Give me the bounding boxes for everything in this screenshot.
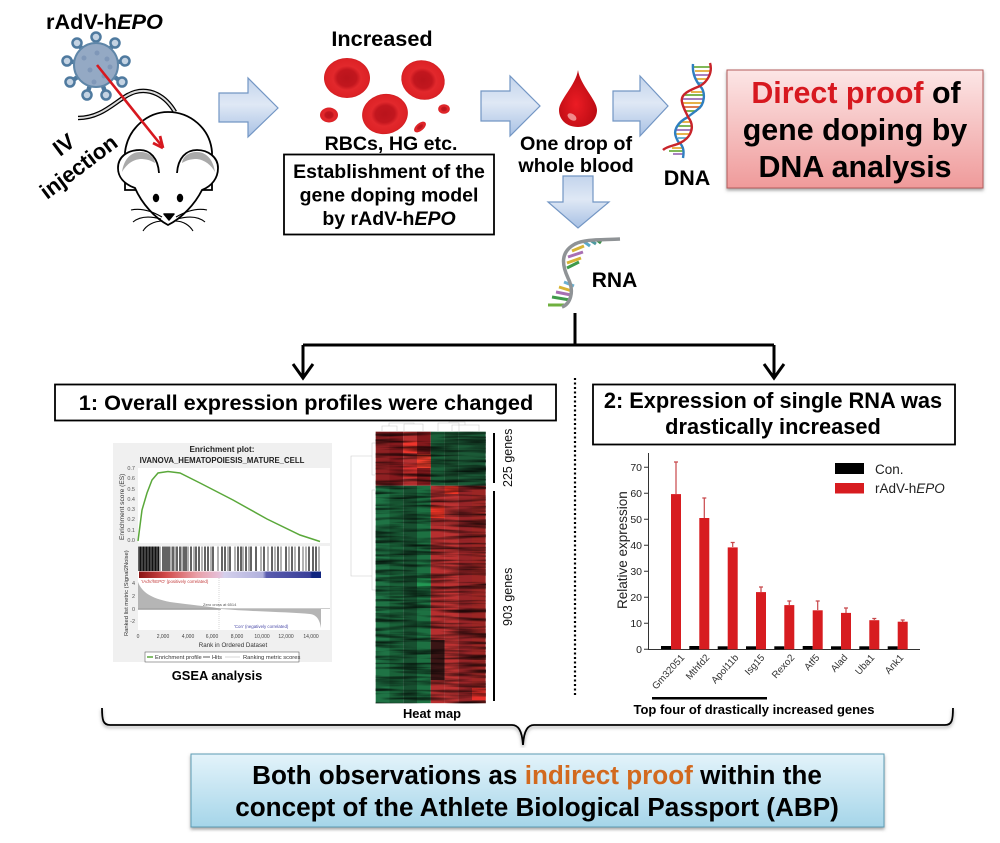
chart: GSEA enrichment plot: 0.0 xyxy=(127,538,135,544)
arrow: to blood drop xyxy=(481,76,540,136)
legend: Con. xyxy=(875,462,904,477)
legend xyxy=(835,462,945,496)
chart: relative expression bars: 40 xyxy=(630,540,642,552)
label: 225 genes: 225 genes xyxy=(501,429,515,487)
chart: GSEA enrichment plot: Ranked list metric (Signal2Noise) xyxy=(124,550,130,636)
heading: panel 2 xyxy=(593,384,955,444)
box: gene doping model: Establishment of the xyxy=(293,161,485,183)
chart: GSEA enrichment plot: 0.2 xyxy=(127,517,135,523)
icon: RNA strand xyxy=(548,239,620,307)
chart: relative expression bars xyxy=(615,453,945,692)
connector: split arrows xyxy=(293,313,784,378)
label: one drop of whole blood: One drop of xyxy=(520,133,632,155)
chart: GSEA enrichment plot: IVANOVA_HEMATOPOIESIS_MATURE_CELL xyxy=(140,456,305,465)
arrow: to RNA xyxy=(548,176,609,228)
chart: GSEA enrichment plot: 0.5 xyxy=(127,487,135,493)
label: one drop of whole blood: whole blood xyxy=(517,155,634,177)
label: one drop of whole blood xyxy=(517,133,634,177)
chart: GSEA enrichment plot: Ranking metric scores xyxy=(243,655,300,661)
box: gene doping model xyxy=(284,154,494,234)
gene labels xyxy=(650,652,906,692)
chart: GSEA enrichment plot: 0.7 xyxy=(127,466,135,472)
label: rAdV-hEPO: rAdV-hEPO xyxy=(46,9,163,34)
gene labels: Apol11b xyxy=(709,652,742,686)
label: IV injection: injection xyxy=(35,130,122,204)
legend: rAdV-hEPO xyxy=(875,481,945,496)
chart: GSEA enrichment plot: 4,000 xyxy=(182,634,194,640)
chart: relative expression bars: 10 xyxy=(630,618,642,630)
control bars xyxy=(661,646,898,649)
chart: GSEA enrichment plot: Enrichment plot: xyxy=(189,445,255,454)
gene labels: Gm32051 xyxy=(650,653,687,692)
box: gene doping model: by rAdV-hEPO xyxy=(322,208,456,230)
gene labels: Alad xyxy=(829,653,850,675)
label: Heat map: Heat map xyxy=(403,706,461,721)
box: indirect proof: concept of the Athlete Biological Passport (ABP) xyxy=(235,792,839,822)
chart: GSEA enrichment plot: Enrichment score (ES) xyxy=(119,474,126,540)
label: 903 genes: 903 genes xyxy=(501,568,515,626)
box: direct proof xyxy=(727,70,983,188)
box: direct proof: DNA analysis xyxy=(758,150,952,184)
chart: GSEA enrichment plot: Hits xyxy=(212,655,222,661)
chart: GSEA enrichment plot: 0.6 xyxy=(127,476,135,482)
treated bars xyxy=(671,494,908,649)
heading: panel 1 xyxy=(55,384,556,420)
icon: DNA helix xyxy=(663,63,711,158)
heading: panel 2: drastically increased xyxy=(665,414,881,439)
chart: GSEA enrichment plot: 0.1 xyxy=(127,528,135,534)
box: direct proof: gene doping by xyxy=(743,113,967,147)
label: DNA: DNA xyxy=(664,166,710,190)
gene labels: Uba1 xyxy=(853,653,877,677)
heading: panel 2: 2: Expression of single RNA was xyxy=(604,388,942,413)
label: top four genes: Top four of drastically increased genes xyxy=(633,702,875,717)
arrow: injection xyxy=(97,65,163,148)
chart: GSEA enrichment plot: 0 xyxy=(137,634,140,640)
box: indirect proof: Both observations as indirect proof within the xyxy=(252,760,822,790)
chart: GSEA enrichment plot: 4 xyxy=(132,581,135,587)
box: gene doping model: gene doping model xyxy=(300,184,478,206)
icon: virus xyxy=(62,32,130,100)
chart: GSEA enrichment plot: 12,000 xyxy=(278,634,294,640)
label: RNA: RNA xyxy=(592,269,637,292)
arrow: to DNA xyxy=(613,76,668,136)
chart: GSEA enrichment plot: Rank in Ordered Dataset xyxy=(199,642,267,649)
chart: GSEA enrichment plot: 'Con' (negatively correlated) xyxy=(234,624,289,629)
chart: GSEA enrichment plot: 2,000 xyxy=(157,634,169,640)
chart: relative expression bars: 50 xyxy=(630,514,642,526)
label: GSEA analysis: GSEA analysis xyxy=(172,668,262,683)
chart: GSEA enrichment plot: 0.3 xyxy=(127,507,135,513)
box: indirect proof xyxy=(191,754,884,827)
chart: GSEA enrichment plot: Enrichment profile xyxy=(155,655,202,661)
chart: GSEA enrichment plot: 2 xyxy=(132,594,135,600)
heading: panel 1: 1: Overall expression profiles were changed xyxy=(79,390,533,415)
chart: GSEA enrichment plot xyxy=(113,443,332,662)
label: 225 genes xyxy=(494,429,515,487)
chart: GSEA enrichment plot: 0 xyxy=(132,607,135,613)
gene labels: Mthfd2 xyxy=(684,653,712,682)
gene labels: Rexo2 xyxy=(770,653,797,681)
chart: GSEA enrichment plot: 14,000 xyxy=(303,634,319,640)
label: RBCs, HG etc.: RBCs, HG etc. xyxy=(325,133,457,155)
chart: GSEA enrichment plot: 6,000 xyxy=(206,634,218,640)
chart: GSEA enrichment plot: 10,000 xyxy=(254,634,270,640)
label: IV injection: IV xyxy=(48,128,80,161)
chart: relative expression bars: 60 xyxy=(630,488,642,500)
error bars xyxy=(674,462,905,622)
chart: relative expression bars: Relative expression xyxy=(615,491,630,609)
chart: relative expression bars: 70 xyxy=(630,462,642,474)
chart: relative expression bars: 20 xyxy=(630,592,642,604)
icon: red blood cells xyxy=(320,54,450,138)
icon: blood drop xyxy=(559,70,597,127)
icon: mouse xyxy=(78,91,218,231)
gene labels: Isg15 xyxy=(743,652,768,678)
label: Increased: Increased xyxy=(331,26,433,51)
gene labels: Ank1 xyxy=(883,653,906,677)
chart: GSEA enrichment plot: 0.4 xyxy=(127,497,135,503)
brace xyxy=(102,708,953,745)
chart: heat map xyxy=(351,422,486,703)
chart: relative expression bars: 30 xyxy=(630,566,642,578)
gene labels: Atf5 xyxy=(802,652,823,673)
divider xyxy=(574,378,576,696)
chart: GSEA enrichment plot: 8,000 xyxy=(231,634,243,640)
chart: GSEA enrichment plot: Zero cross at 6514 xyxy=(203,602,237,607)
chart: GSEA enrichment plot: 'rAdV/hEPO' (positively correlated) xyxy=(141,579,209,584)
chart: relative expression bars: 0 xyxy=(636,644,642,656)
chart: GSEA enrichment plot: -2 xyxy=(130,619,135,625)
arrow: to red cells xyxy=(219,78,278,137)
box: direct proof: Direct proof of xyxy=(751,76,962,110)
